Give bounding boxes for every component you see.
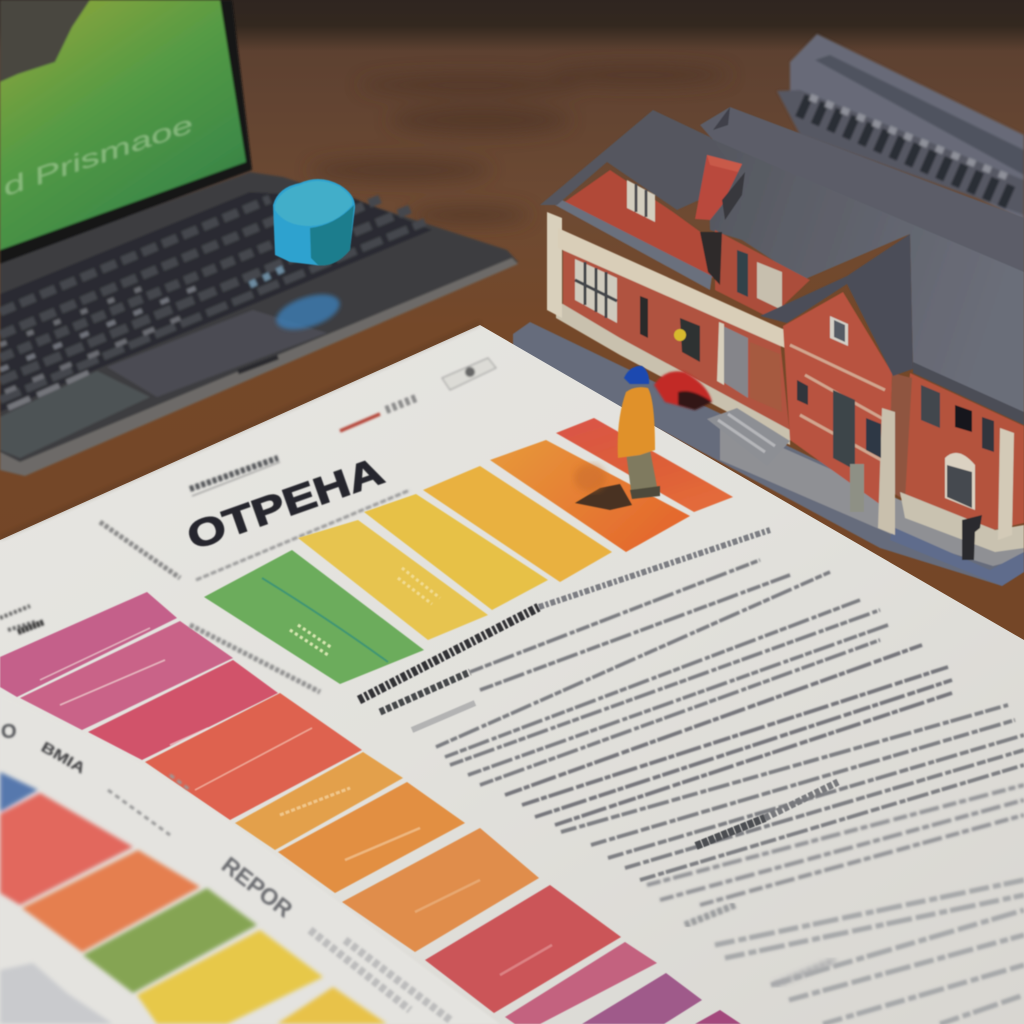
- upper shutter: [737, 250, 748, 297]
- paragraph block five: [715, 880, 1024, 1024]
- model house: [513, 34, 1024, 586]
- toy figure on chart: [574, 366, 660, 510]
- left colour scale chart: [0, 592, 741, 1024]
- right cream column: [998, 428, 1014, 540]
- figure feet: [630, 486, 660, 499]
- attic window: [627, 180, 655, 222]
- brick strip: [888, 373, 912, 500]
- red toy car: [654, 371, 712, 410]
- soft shadow under sheet edge: [0, 323, 480, 538]
- bar: magenta: [505, 942, 657, 1024]
- icon: blue block on keyboard: [272, 179, 355, 336]
- base platform: [513, 322, 1024, 586]
- laptop: [0, 0, 518, 476]
- trackpad: [107, 310, 327, 397]
- bar: green: [204, 550, 424, 684]
- green door: [833, 390, 855, 470]
- bold label: BMIA: [38, 739, 88, 778]
- bar: orange 3: [342, 828, 539, 952]
- round ornament: [674, 318, 700, 362]
- bar: orange: [22, 850, 200, 952]
- cream steps right: [900, 492, 1024, 552]
- blurred label: REPOR: [217, 851, 298, 923]
- right gable wall: [783, 292, 892, 510]
- paragraph block three: [561, 705, 1024, 880]
- lower small heading: [775, 960, 835, 985]
- bar: orange: [235, 752, 403, 850]
- second heading: [380, 672, 470, 712]
- blurred screen caption: d Prismaoe: [0, 111, 197, 202]
- bar: red orange: [556, 418, 733, 512]
- lower left overlapping sheet: [0, 695, 500, 1024]
- main roof: [707, 137, 1024, 425]
- paragraph block one: [436, 560, 888, 785]
- roof eave shadow: [913, 362, 1024, 425]
- title: OTPEHA: [182, 450, 389, 558]
- upper window: [757, 262, 782, 310]
- small overline caption: [190, 458, 278, 489]
- faint notes: [108, 775, 190, 835]
- lower left colour bars: [0, 772, 387, 1024]
- lower facade wall: [563, 248, 790, 436]
- base front edge: [890, 527, 1024, 586]
- arched window: [945, 453, 975, 510]
- caption rule: [192, 462, 280, 496]
- right wing wall: [900, 373, 1024, 530]
- left gable wall: [563, 170, 717, 278]
- cream column: [878, 408, 895, 535]
- figure stain: [574, 464, 606, 492]
- gable left window: [797, 380, 808, 405]
- figure shadow: [575, 484, 632, 510]
- paragraph block two: [505, 645, 952, 825]
- chart on screen: [0, 0, 90, 82]
- left cream column: [547, 212, 562, 318]
- subheading continuation: [539, 530, 770, 607]
- ring label: O: [1, 721, 17, 743]
- left roof: [540, 110, 743, 210]
- bar: amber: [423, 466, 612, 582]
- street lamp: [962, 515, 982, 560]
- screen: [0, 0, 246, 250]
- small left heading: [685, 905, 735, 925]
- header tag icon: [442, 358, 496, 390]
- bar: yellow: [298, 520, 488, 640]
- bar: pink: [0, 592, 177, 697]
- shutters and sign: [921, 385, 940, 428]
- bar: green: [83, 888, 257, 993]
- gable right window: [866, 418, 881, 458]
- back wall with windows: [777, 90, 1024, 215]
- block body: [273, 179, 355, 265]
- gable trim: [790, 345, 885, 462]
- upper red wall with dormer: [715, 230, 810, 318]
- bar: crimson: [88, 660, 278, 760]
- bar: yellow 2: [364, 494, 548, 610]
- figure hard hat: [624, 366, 649, 384]
- bar: blue: [0, 772, 38, 812]
- screen bezel: [0, 0, 252, 264]
- dark window: [640, 296, 648, 338]
- green bar curve: [262, 578, 388, 662]
- cream band: [558, 228, 785, 348]
- wood grain streaks: [310, 65, 730, 224]
- middle roof: [700, 107, 1024, 276]
- gable small window: [830, 316, 848, 346]
- report header marks: [0, 358, 496, 632]
- front steps: [707, 408, 790, 466]
- cream base strip: [556, 300, 790, 445]
- bar: red: [425, 885, 621, 1013]
- main report sheet: [0, 325, 1024, 1024]
- bar: coral: [145, 693, 362, 820]
- bold inline continuation: [765, 782, 838, 818]
- bar: orange: [490, 440, 690, 552]
- red header rule: [340, 414, 380, 431]
- bar: purple: [582, 973, 702, 1024]
- laptop body: [0, 172, 518, 475]
- bar labels: [40, 628, 552, 975]
- back roof top: [790, 34, 1024, 220]
- top colour scale chart: [204, 418, 733, 684]
- chimney: [695, 155, 742, 220]
- right gable roof: [760, 234, 913, 376]
- left gable fascia: [555, 200, 712, 290]
- margin scribble: [190, 625, 320, 692]
- trash can: [850, 464, 864, 512]
- paragraph block four: [647, 785, 1024, 905]
- yellow label: [398, 568, 440, 604]
- tiny left labels: [0, 606, 35, 630]
- bar: yellow 2: [277, 987, 387, 1024]
- bar: rose: [20, 621, 233, 730]
- bold inline subheading: [696, 818, 765, 846]
- subheading: [359, 607, 539, 700]
- faint block: [310, 930, 450, 1020]
- grey rule: [412, 703, 475, 730]
- green bar label: [290, 625, 332, 655]
- block top: [275, 181, 352, 226]
- block reflection: [272, 288, 344, 336]
- report body text: [359, 530, 1024, 1024]
- left caption: [100, 522, 180, 578]
- back building: [777, 34, 1024, 220]
- keyboard keys: [0, 199, 425, 408]
- block shaded face: [310, 205, 354, 265]
- large windows: [575, 259, 617, 323]
- header marks: [386, 398, 416, 410]
- rule above chart: [196, 490, 410, 580]
- keyboard recess: [0, 192, 432, 412]
- figure legs: [626, 450, 658, 498]
- bar: orange 2: [278, 782, 465, 893]
- bar: plum: [695, 1010, 741, 1024]
- palm rest left: [0, 371, 150, 458]
- figure body: [618, 387, 655, 458]
- bar: coral: [0, 793, 133, 905]
- grey corner sheet: [0, 963, 113, 1024]
- recessed door: [723, 326, 748, 398]
- laptop hinge notch: [238, 357, 278, 372]
- bar: yellow: [137, 930, 323, 1024]
- front edge: [0, 258, 518, 476]
- left sheet labels: [1, 625, 450, 1020]
